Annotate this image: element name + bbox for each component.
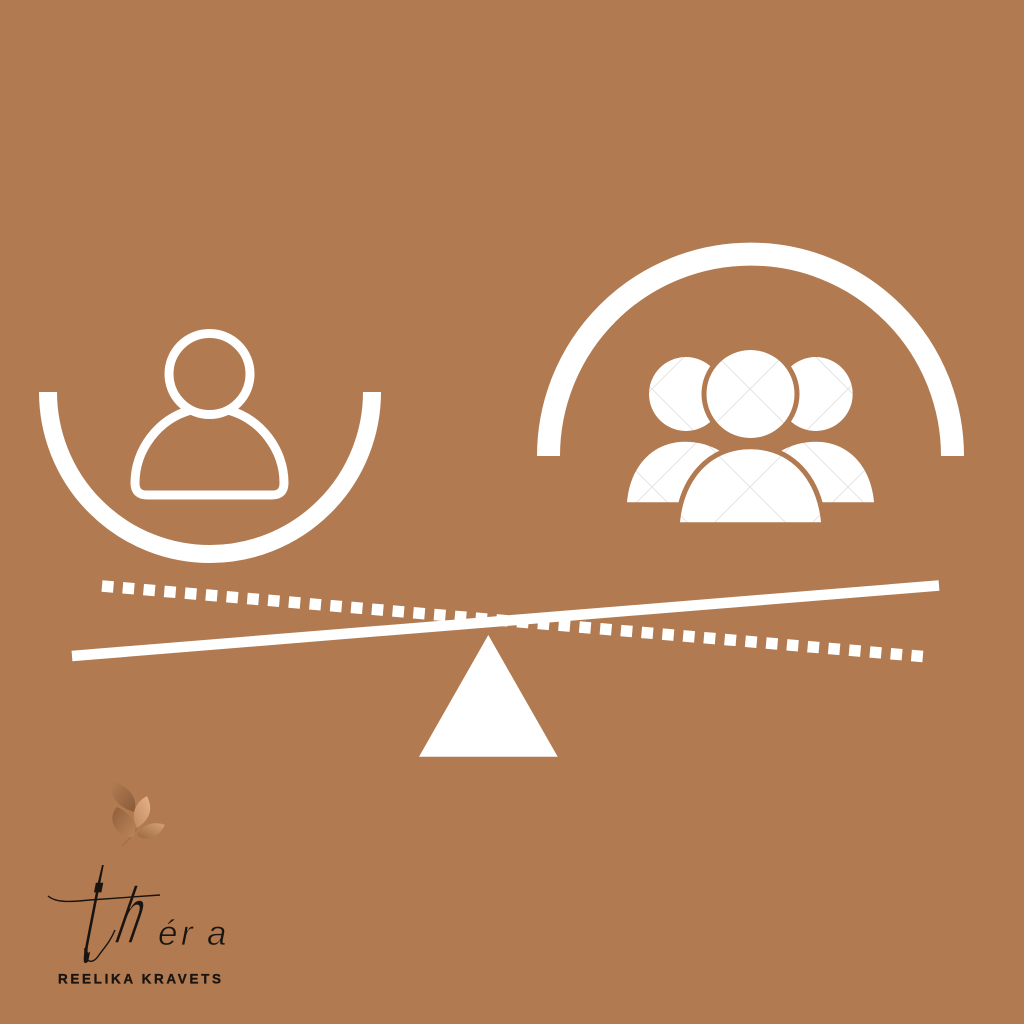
person head [169,334,250,414]
triangle fulcrum [419,635,558,757]
front person in group [680,350,821,522]
icon: single person outline [135,334,284,495]
signature wordmark [48,827,226,995]
left bowl arc (open upward) [48,392,372,554]
signature wordmark: éra [158,914,226,953]
person body [135,410,284,495]
signature wordmark: t [74,827,115,995]
right person in group [779,357,874,502]
dashed tilted line (previous balance) [102,586,923,656]
signature wordmark: h [106,872,159,961]
logo: thera reelika kravets [48,782,226,995]
icon: copper leaves [112,782,165,846]
right dome arc (open downward) [548,254,952,456]
name caption: REELIKA KRAVETS [58,972,221,986]
icon: group of three people [627,350,874,522]
left person in group [627,357,723,502]
solid tilted beam [72,586,939,656]
